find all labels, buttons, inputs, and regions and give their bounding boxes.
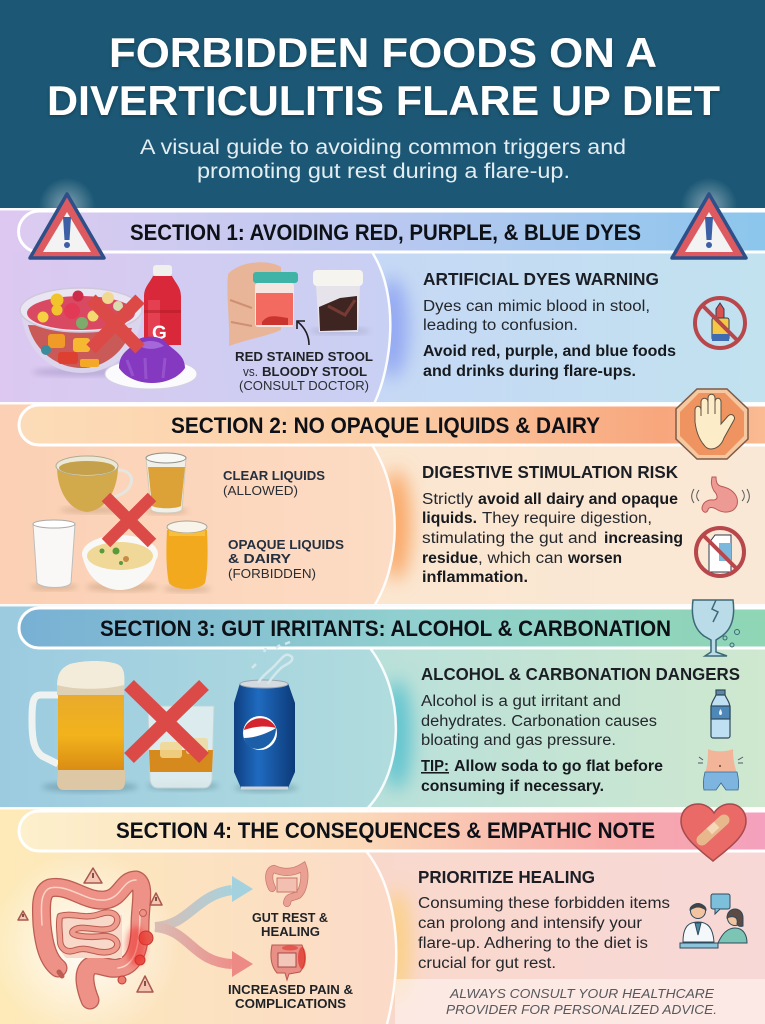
text: digestive stimulation risk: , which can [478, 550, 563, 567]
footer note band: ALWAYS CONSULT YOUR HEALTHCARE [449, 986, 714, 1001]
text: digestive stimulation risk: stimulating the gut and [422, 530, 597, 547]
image: apple juice glass [144, 453, 188, 514]
stool comparison label: BLOODY STOOL [262, 364, 367, 379]
text: artificial dyes warning: Dyes can mimic blood in stool, [423, 298, 650, 315]
section 2 heading bar [19, 405, 765, 445]
label: opaque liquids: OPAQUE LIQUIDS [228, 537, 344, 552]
panel: section 3 alcohol [0, 600, 765, 809]
label: gut rest and healing [252, 910, 328, 939]
text: alcohol and carbonation dangers: dehydrates. Carbonation causes [421, 713, 657, 730]
image: gatorade bottle [144, 265, 181, 345]
section 1 heading bar: SECTION 1: AVOIDING RED, PURPLE, & BLUE DYES [130, 220, 641, 245]
icon: heart with bandage [681, 804, 746, 861]
text: digestive stimulation risk: liquids. [422, 510, 477, 527]
image: tea cup [56, 456, 132, 513]
image: glass of milk [30, 520, 78, 590]
text: alcohol and carbonation dangers: Alcohol is a gut irritant and [421, 693, 621, 710]
label: clear liquids: (ALLOWED) [223, 483, 298, 498]
text: digestive stimulation risk: Strictly [422, 491, 473, 508]
text: alcohol and carbonation dangers: consuming if necessary. [421, 778, 604, 795]
panel: section 4 consequences [0, 804, 765, 1024]
icon: broken wine glass [692, 600, 740, 656]
label: increased pain and complications: COMPLICATIONS [235, 996, 346, 1011]
image: rainbow candy bowl [20, 288, 142, 376]
footer note band: PROVIDER FOR PERSONALIZED ADVICE. [446, 1002, 717, 1017]
image: purple gelatin on a plate [105, 337, 197, 389]
section 3 heading bar: SECTION 3: GUT IRRITANTS: ALCOHOL & CARBONATION [100, 616, 671, 641]
icon: water bottle [711, 690, 730, 738]
panel: section 1 dyes [0, 178, 765, 404]
arrow: upward to gut rest [155, 876, 253, 927]
image: gatorade bottle: G [152, 323, 167, 344]
stool comparison label [235, 349, 373, 393]
title: FORBIDDEN FOODS ON A [109, 29, 657, 76]
text: digestive stimulation risk: increasing [604, 530, 683, 547]
icon: small warning triangles [18, 868, 162, 992]
icon: no milk carton [696, 528, 744, 576]
text: prioritize healing: Consuming these forbidden items [418, 895, 670, 912]
text: digestive stimulation risk: DIGESTIVE STIMULATION RISK [422, 462, 678, 482]
label: increased pain and complications: INCREASED PAIN & [228, 982, 353, 997]
text: artificial dyes warning: Avoid red, purple, and blue foods [423, 343, 676, 360]
section 2 heading bar: SECTION 2: NO OPAQUE LIQUIDS & DAIRY [171, 413, 600, 438]
image: beer mug [32, 661, 138, 792]
label: opaque liquids: (FORBIDDEN) [228, 566, 316, 581]
text: digestive stimulation risk: residue [422, 550, 478, 567]
label: gut rest and healing: GUT REST & [252, 910, 328, 925]
subtitle: A visual guide to avoiding common triggers and [140, 135, 626, 159]
text: prioritize healing: can prolong and intensify your [418, 915, 642, 932]
icon: no dye bottle [695, 298, 745, 348]
image: bowl of cream soup [82, 535, 158, 591]
text: digestive stimulation risk [422, 462, 683, 586]
text: digestive stimulation risk: avoid all dairy and opaque [478, 491, 678, 508]
title [47, 29, 720, 124]
text: prioritize healing: crucial for gut rest. [418, 955, 556, 972]
section 3 heading bar [19, 608, 765, 648]
subtitle [140, 135, 626, 183]
icon: red cross over dyed foods [91, 299, 140, 349]
arrow: downward to complications [155, 927, 253, 977]
text: digestive stimulation risk: inflammation. [422, 569, 528, 586]
icon: stomach [692, 477, 749, 512]
image: hand holding specimen cup [227, 262, 298, 346]
text: digestive stimulation risk: They require digestion, [482, 510, 652, 527]
title: DIVERTICULITIS FLARE UP DIET [47, 77, 720, 124]
text: artificial dyes warning [423, 269, 676, 380]
icon: red cross over liquids [106, 497, 152, 543]
text: artificial dyes warning: leading to confusion. [423, 317, 578, 334]
text: alcohol and carbonation dangers: TIP: [421, 758, 449, 775]
label: gut rest and healing: HEALING [261, 924, 320, 939]
image: soda can [234, 642, 298, 792]
arrow: to red cup [297, 321, 309, 345]
section 4 heading bar [19, 811, 765, 851]
stool comparison label: (CONSULT DOCTOR) [239, 378, 369, 393]
image: whisky glass [147, 706, 219, 790]
image: bloody stool cup [310, 270, 370, 334]
panel: header [0, 0, 765, 209]
icon: doctor and patient [680, 894, 747, 948]
label: opaque liquids: & DAIRY [228, 551, 291, 566]
section 4 heading bar: SECTION 4: THE CONSEQUENCES & EMPATHIC NOTE [116, 818, 655, 843]
text: alcohol and carbonation dangers: bloating and gas pressure. [421, 732, 616, 749]
text: prioritize healing [418, 867, 670, 972]
label: clear liquids [223, 468, 325, 498]
illustration: inflamed colon [41, 880, 153, 1000]
text: artificial dyes warning: ARTIFICIAL DYES WARNING [423, 269, 659, 289]
text: artificial dyes warning: and drinks during flare-ups. [423, 363, 636, 380]
text: prioritize healing: PRIORITIZE HEALING [418, 867, 595, 887]
icon: inflamed small colon [271, 945, 306, 980]
panel: section 2 dairy [0, 389, 765, 606]
section 1 heading bar [18, 211, 765, 252]
stool comparison label: vs. [243, 364, 258, 379]
text: alcohol and carbonation dangers: ALCOHOL & CARBONATION DANGERS [421, 664, 740, 684]
text: alcohol and carbonation dangers [421, 664, 740, 795]
stool comparison label: RED STAINED STOOL [235, 349, 373, 364]
icon: red cross over alcohol [129, 685, 204, 758]
icon: warning triangle left [30, 194, 104, 258]
label: clear liquids: CLEAR LIQUIDS [223, 468, 325, 483]
icon: warning triangle right [672, 194, 746, 258]
label: increased pain and complications [228, 982, 353, 1011]
label: opaque liquids [228, 537, 344, 581]
text: digestive stimulation risk: worsen [567, 550, 622, 567]
footer note band [395, 979, 765, 1024]
icon: stop hand octagon [676, 389, 748, 459]
subtitle: promoting gut rest during a flare-up. [197, 159, 570, 183]
icon: bloated waist [698, 749, 743, 790]
text: prioritize healing: flare-up. Adhering to the diet is [418, 935, 648, 952]
icon: healthy colon [269, 867, 304, 903]
text: alcohol and carbonation dangers: Allow soda to go flat before [454, 758, 663, 775]
image: orange juice glass [163, 521, 211, 592]
